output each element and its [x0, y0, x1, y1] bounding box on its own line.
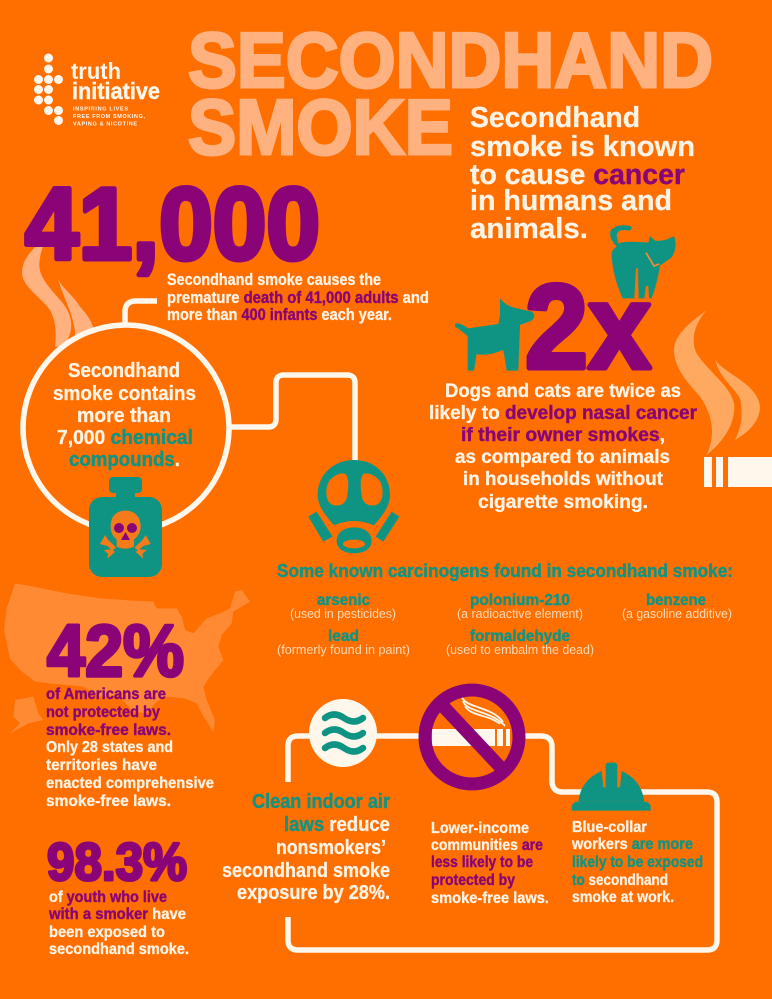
connector: circle to death text: [125, 301, 157, 326]
logo wordmark: initiative: [72, 78, 160, 104]
text: lower-income communities: communities are: [431, 837, 543, 854]
text: lower-income communities: smoke-free laws.: [431, 890, 549, 907]
map of the United States: [4, 583, 250, 733]
intro text: known to cause cancer: animals.: [470, 213, 588, 245]
text: Americans not protected: smoke-free laws.: [46, 793, 171, 810]
logo wordmark: FREE FROM SMOKING,: [73, 114, 145, 120]
text: lower-income communities: Lower-income: [431, 820, 529, 837]
text: clean indoor air laws: secondhand smoke: [222, 860, 390, 882]
text: dogs and cats: as compared to animals: [455, 447, 670, 468]
names: lead: [328, 628, 359, 645]
text: dogs and cats: cigarette smoking.: [478, 492, 648, 513]
text: clean indoor air laws: exposure by 28%.: [237, 882, 390, 904]
title: SMOKE: [188, 83, 453, 171]
text: dogs and cats: Dogs and cats are twice as: [445, 381, 681, 402]
icon: poison bottle: [89, 477, 162, 577]
icon: smoking cigarette right: [674, 310, 772, 487]
text: blue-collar workers: [571, 819, 703, 906]
connector: bottom loop: [288, 736, 717, 950]
text: clean indoor air laws: nonsmokers’: [276, 837, 386, 859]
circle text: smoke contains: [53, 383, 196, 405]
text: premature deaths: premature death of 41,000 adults and: [167, 289, 429, 307]
text: Americans not protected: [46, 686, 214, 810]
intro text: known to cause cancer: in humans and: [470, 185, 672, 217]
logo wordmark: VAPING & NICOTINE: [73, 122, 137, 128]
text: lower-income communities: [431, 820, 549, 907]
carcinogens heading: Some known carcinogens found in secondhand smoke:: [277, 561, 733, 581]
text: dogs and cats: if their owner smokes,: [461, 425, 665, 446]
text: premature deaths: [167, 271, 429, 324]
descriptions: (formerly found in paint): [277, 642, 410, 657]
text: blue-collar workers: likely to be exposed: [572, 854, 703, 871]
intro text: known to cause cancer: [470, 102, 695, 245]
names: benzene: [646, 592, 706, 609]
descriptions: [277, 606, 732, 657]
names: [317, 592, 706, 645]
intro text: known to cause cancer: smoke is known: [470, 131, 695, 163]
circle text: [53, 360, 196, 471]
text: blue-collar workers: workers are more: [571, 836, 693, 853]
circle text: Secondhand: [68, 360, 180, 382]
names: polonium-210: [470, 592, 570, 609]
logo: truth initiative: [34, 54, 160, 128]
text: clean indoor air laws: Clean indoor air: [252, 791, 390, 813]
text: youth exposed: with a smoker have: [48, 906, 186, 923]
big number: 42%: 42%: [47, 611, 184, 692]
descriptions: (used in pesticides): [290, 606, 396, 621]
text: Americans not protected: Only 28 states and: [46, 739, 173, 756]
big number: 41,000: 41,000: [25, 167, 320, 281]
descriptions: (a radioactive element): [457, 606, 583, 621]
text: youth exposed: [48, 889, 189, 958]
icon: no smoking: [425, 690, 519, 784]
circle text: compounds.: [69, 449, 180, 471]
circle: chemical compounds: [23, 325, 229, 531]
names: formaldehyde: [470, 628, 570, 645]
text: premature deaths: more than 400 infants each year.: [167, 306, 392, 324]
big number: 98.3%: 98.3%: [47, 833, 187, 892]
text: blue-collar workers: smoke at work.: [572, 889, 674, 906]
logo wordmark: [71, 58, 160, 128]
text: dogs and cats: [429, 381, 698, 513]
text: dogs and cats: in households without: [463, 469, 664, 490]
text: blue-collar workers: to secondhand: [572, 872, 668, 889]
text: Americans not protected: territories have: [46, 757, 157, 774]
logo dots: [34, 54, 63, 125]
text: blue-collar workers: Blue-collar: [572, 819, 647, 836]
descriptions: (a gasoline additive): [622, 606, 732, 621]
title: SECONDHAND: [188, 16, 713, 104]
logo wordmark: truth: [71, 58, 121, 84]
icon: clean air: [309, 699, 377, 767]
text: clean indoor air laws: laws reduce: [284, 814, 390, 836]
text: premature deaths: Secondhand smoke causes the: [167, 271, 381, 289]
text: youth exposed: of youth who live: [49, 889, 167, 906]
icon: gas mask: [308, 460, 399, 553]
text: youth exposed: been exposed to: [49, 924, 165, 941]
descriptions: (used to embalm the dead): [446, 642, 594, 657]
icon: hard hat: [572, 763, 651, 811]
text: youth exposed: secondhand smoke.: [49, 941, 189, 958]
smoke: left wisps: [22, 235, 94, 347]
icon: dog: [455, 298, 534, 371]
title: [188, 16, 713, 171]
text: dogs and cats: likely to develop nasal cancer: [429, 403, 698, 424]
circle text: more than: [77, 405, 171, 427]
text: Americans not protected: of Americans are: [46, 686, 166, 703]
text: lower-income communities: protected by: [431, 872, 515, 889]
intro text: known to cause cancer: to cause cancer: [470, 159, 685, 191]
text: Americans not protected: enacted comprehensive: [46, 775, 214, 792]
big number: 2x: 2x: [525, 260, 651, 394]
text: lower-income communities: less likely to be: [431, 854, 533, 871]
names: arsenic: [317, 592, 370, 609]
text: clean indoor air laws: [222, 791, 390, 904]
connector: circle to gas mask: [230, 375, 355, 462]
text: Americans not protected: smoke-free laws.: [46, 722, 171, 739]
carcinogen list: [277, 592, 732, 657]
circle text: 7,000 chemical: [57, 427, 193, 449]
intro text: known to cause cancer: Secondhand: [470, 102, 640, 134]
icon: cat: [610, 225, 676, 298]
logo wordmark: INSPIRING LIVES: [73, 106, 128, 112]
text: Americans not protected: not protected by: [46, 704, 160, 721]
